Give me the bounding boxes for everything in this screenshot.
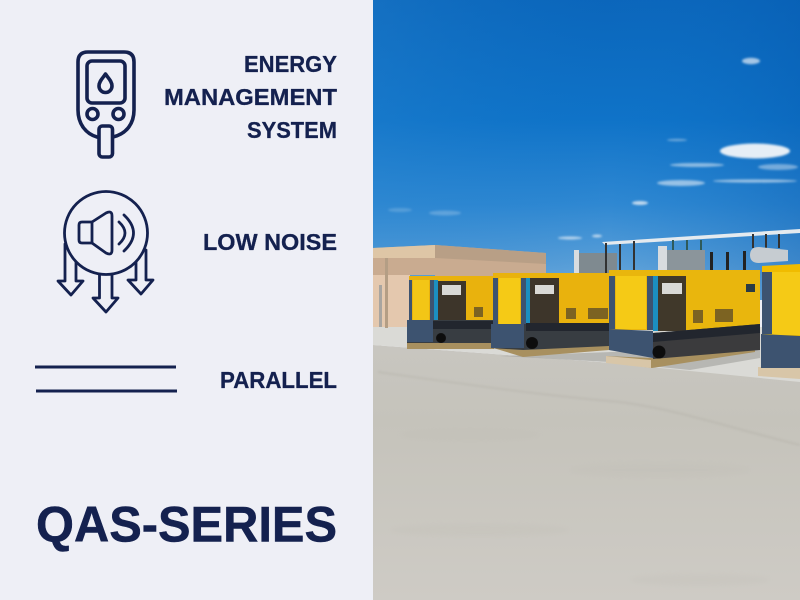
photo: generators at industrial site [373,0,800,600]
ground [373,345,800,600]
heading: energy management system: SYSTEM [247,117,337,143]
substation equipment [574,229,800,274]
heading: energy management system: ENERGY [244,51,337,77]
title: QAS-series: QAS-SERIES [36,496,337,552]
heading: parallel: PARALLEL [220,367,337,393]
heading: energy management system [164,51,338,143]
generator 1 [407,276,494,349]
sky with clouds [373,0,800,300]
generator 4 [758,264,800,379]
left panel background [0,0,373,600]
icon: parallel lines [35,367,177,391]
heading: low noise: LOW NOISE [203,229,337,255]
heading: energy management system: MANAGEMENT [164,84,338,110]
beige building [373,245,546,328]
icon: energy management device [78,52,134,157]
generator 3 [606,270,760,368]
generator 2 [490,273,609,357]
ground streak [378,372,800,445]
pavement strip behind generators [373,327,800,382]
icon: low noise speaker with arrows [58,192,153,312]
ground mottling [390,429,770,586]
